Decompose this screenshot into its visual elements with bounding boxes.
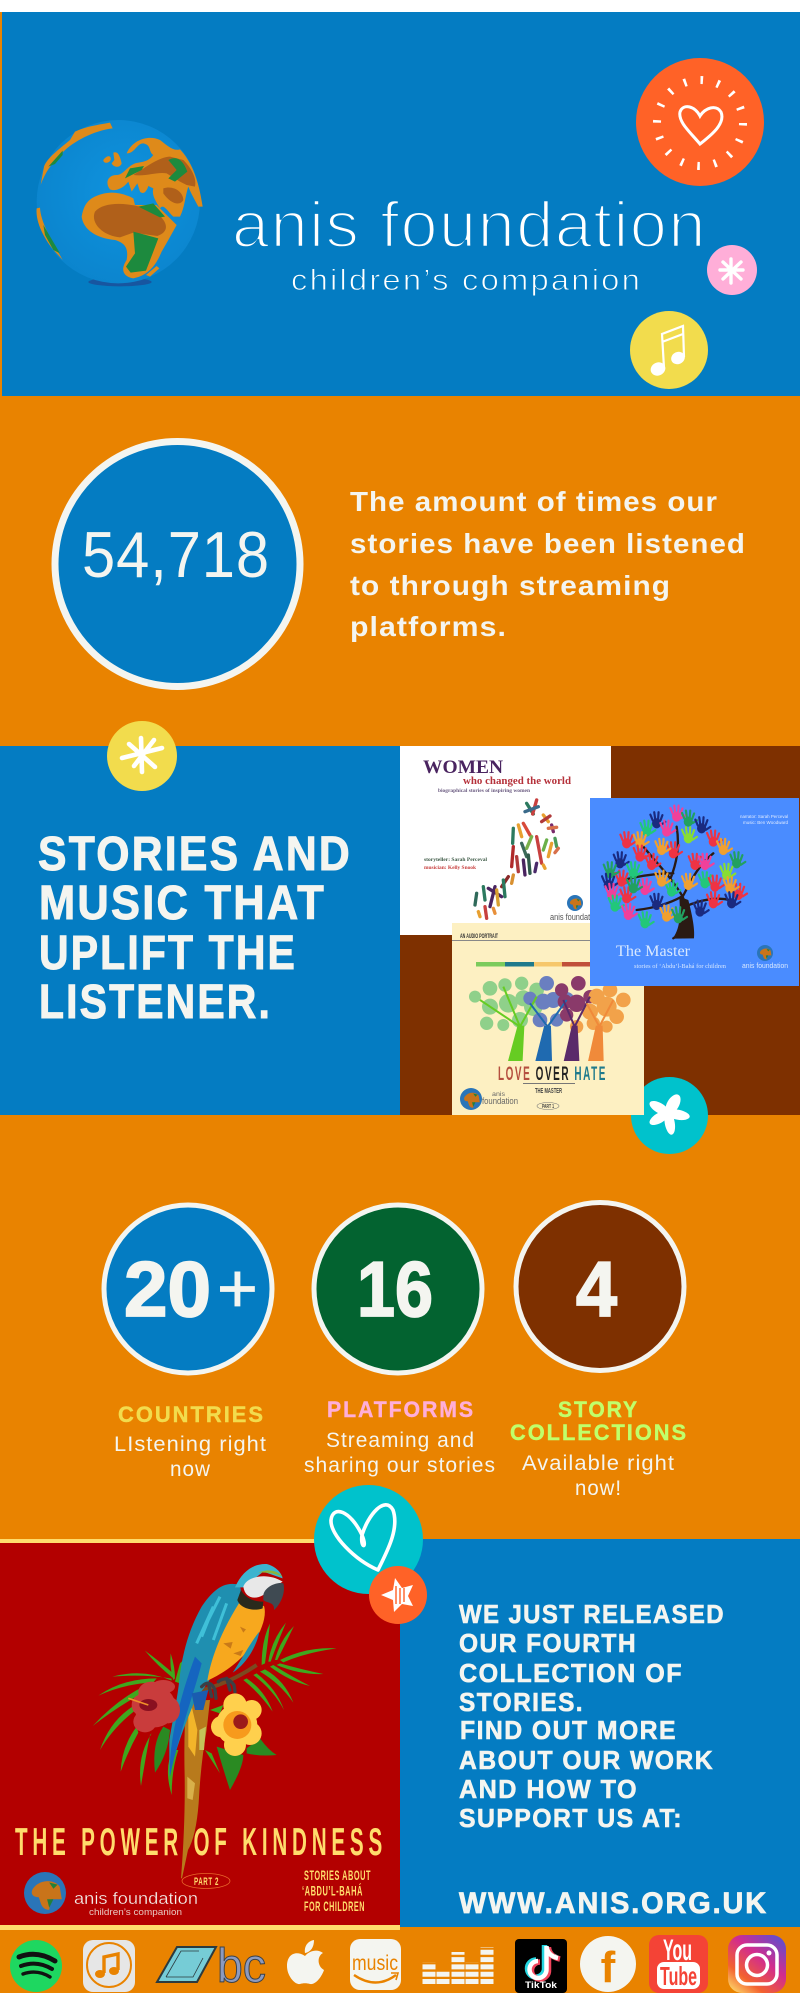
description text: stories have been listened: [350, 528, 746, 559]
call to action text: WE JUST RELEASED: [459, 1599, 725, 1629]
album cover: Love over hate: [452, 923, 644, 1115]
website url: WWW.ANIS.ORG.UK: [459, 1887, 768, 1920]
album cover: Love over hate: THE MASTER: [535, 1088, 562, 1095]
icon: yellow asterisk badge: [107, 721, 177, 791]
call to action text: OUR FOURTH: [459, 1628, 637, 1658]
cover title: THE POWER OF KINDNESS: [15, 1821, 387, 1864]
icon: youtube: You: [663, 1934, 692, 1967]
cover logo: children’s companion: [89, 1907, 182, 1918]
album cover: The Master: [590, 798, 799, 986]
stat: story collections: COLLECTIONS: [510, 1420, 688, 1445]
icon: instagram: [728, 1935, 786, 1993]
album cover: The Master: music: Ben Woodward: [743, 820, 788, 826]
branch: [197, 1665, 257, 1692]
album cover: Women who changed the world: [400, 746, 611, 935]
album cover: The Master: anis foundation: [742, 961, 788, 970]
album cover: Women who changed the world: storyteller: Sarah Perceval: [424, 857, 487, 863]
icon: clay globe: [37, 120, 203, 286]
description text: The amount of times our: [350, 486, 718, 517]
cover subtitle: FOR CHILDREN: [304, 1898, 365, 1914]
description text: to through streaming: [350, 570, 671, 601]
icon: music note badge: [630, 311, 708, 389]
icon: spotify: [10, 1940, 62, 1992]
stat: story collections: 4: [576, 1245, 617, 1333]
call to action text: [459, 1599, 725, 1833]
part 2 tag: PART 2: [194, 1876, 219, 1888]
parrot feet: [202, 1678, 235, 1698]
album cover: Love over hate: LOVE OVER HATE: [498, 1064, 607, 1085]
four trees: [469, 976, 631, 1060]
panel: stream count: [55, 442, 746, 686]
stat: countries: [104, 1205, 272, 1481]
panel: key numbers: [104, 1202, 688, 1500]
album cover: parrot illustration: [93, 1564, 337, 1878]
part 2 tag: [182, 1874, 230, 1888]
call to action text: ABOUT OUR WORK: [459, 1745, 714, 1775]
heading: UPLIFT THE: [39, 927, 297, 980]
stat: platforms: sharing our stories: [304, 1454, 496, 1477]
icon: bandcamp: [157, 1940, 266, 1993]
red hibiscus: [128, 1680, 180, 1732]
stat: platforms: PLATFORMS: [327, 1397, 475, 1422]
album cover: The Master: stories of ‘Abdu’l-Bahá for children: [634, 963, 727, 970]
icon: amazon music: [350, 1939, 401, 1990]
call to action text: SUPPORT US AT:: [459, 1803, 683, 1833]
album cover: Women who changed the world: musician: Kelly Snook: [424, 865, 477, 871]
icon: deezer: [429, 1947, 487, 1984]
panel: platform icons: [10, 1934, 786, 1993]
album cover: Women who changed the world: who changed the world: [463, 775, 571, 787]
icon: pink asterisk badge: [707, 245, 757, 295]
heading: MUSIC THAT: [39, 877, 326, 930]
icon: bandcamp: bc: [217, 1940, 266, 1993]
icon: flower badge: [631, 1077, 708, 1154]
heading: [38, 828, 352, 1029]
icon: itunes: [83, 1940, 135, 1992]
stat: countries: now: [170, 1458, 211, 1481]
icon: star badge: [369, 1566, 427, 1624]
panel: stories and music: [0, 721, 800, 1154]
album cover: Women who changed the world: anis foundation: [550, 912, 600, 922]
stat: countries: LIstening right: [114, 1433, 267, 1456]
call to action text: AND HOW TO: [459, 1774, 638, 1804]
call to action text: STORIES.: [459, 1687, 584, 1717]
footprint of figures: [475, 800, 558, 918]
perch tail: [181, 1700, 210, 1878]
yellow hibiscus: [211, 1693, 262, 1756]
album cover: Women who changed the world: biographical stories of inspiring women: [438, 789, 530, 794]
icon: heart badge: [636, 58, 764, 186]
album cover: Women who changed the world: WOMEN: [423, 757, 503, 778]
panel: new release: [0, 1485, 800, 1930]
stat: countries: COUNTRIES: [118, 1402, 265, 1427]
stat: platforms: [304, 1205, 496, 1477]
album cover: Love over hate: foundation: [482, 1096, 518, 1106]
cover subtitle: STORIES ABOUT: [304, 1867, 371, 1883]
album cover: Love over hate: AN AUDIO PORTRAIT: [460, 934, 498, 940]
icon: tiktok: [515, 1939, 567, 1993]
cover subtitle: ‘ABDU’L-BAHÁ: [302, 1882, 363, 1898]
palm fronds: [93, 1623, 337, 1795]
stat: countries: 20: [124, 1245, 211, 1333]
stat: story collections: [510, 1202, 688, 1500]
logo wordmark: anis foundation: [232, 188, 707, 261]
cover subtitle: [302, 1867, 371, 1914]
stat circle: 54,718: 54,718: [82, 518, 270, 591]
icon: hand-drawn heart badge: [314, 1485, 423, 1594]
stat: countries: +: [217, 1249, 258, 1327]
stat: story collections: now!: [575, 1477, 622, 1500]
album cover: The Master: narrator: Sarah Perceval: [740, 814, 788, 820]
stat: platforms: 16: [357, 1245, 433, 1333]
description text: [350, 486, 746, 642]
icon: facebook: f: [601, 1943, 616, 1992]
heading: STORIES AND: [38, 828, 352, 881]
cover logo: [24, 1872, 198, 1918]
icon: apple: [287, 1940, 324, 1984]
stat: platforms: Streaming and: [326, 1429, 475, 1452]
hand tree: [602, 806, 747, 939]
icon: youtube: [649, 1934, 708, 1993]
panel: header: [2, 12, 800, 396]
stat circle: 54,718: [55, 442, 300, 686]
icon: tiktok: TikTok: [525, 1980, 558, 1991]
stat: story collections: Available right: [522, 1452, 675, 1475]
heading: LISTENER.: [39, 976, 272, 1029]
album cover: Love over hate: anis: [492, 1092, 505, 1098]
icon: youtube: Tube: [660, 1961, 697, 1991]
icon: facebook: [580, 1936, 636, 1992]
album cover: The Master: The Master: [616, 943, 691, 960]
call to action text: FIND OUT MORE: [460, 1715, 677, 1745]
parrot belly: [207, 1602, 265, 1681]
cover logo: anis foundation: [74, 1889, 198, 1908]
album cover: Love over hate: PART 1: [542, 1104, 554, 1110]
description text: platforms.: [350, 611, 507, 642]
icon: amazon music: music: [352, 1952, 398, 1975]
parrot wing: [169, 1584, 243, 1777]
call to action text: COLLECTION OF: [459, 1658, 683, 1688]
parrot head: [235, 1564, 283, 1587]
stat: story collections: STORY: [558, 1397, 639, 1422]
logo tagline: children’s companion: [291, 264, 642, 297]
